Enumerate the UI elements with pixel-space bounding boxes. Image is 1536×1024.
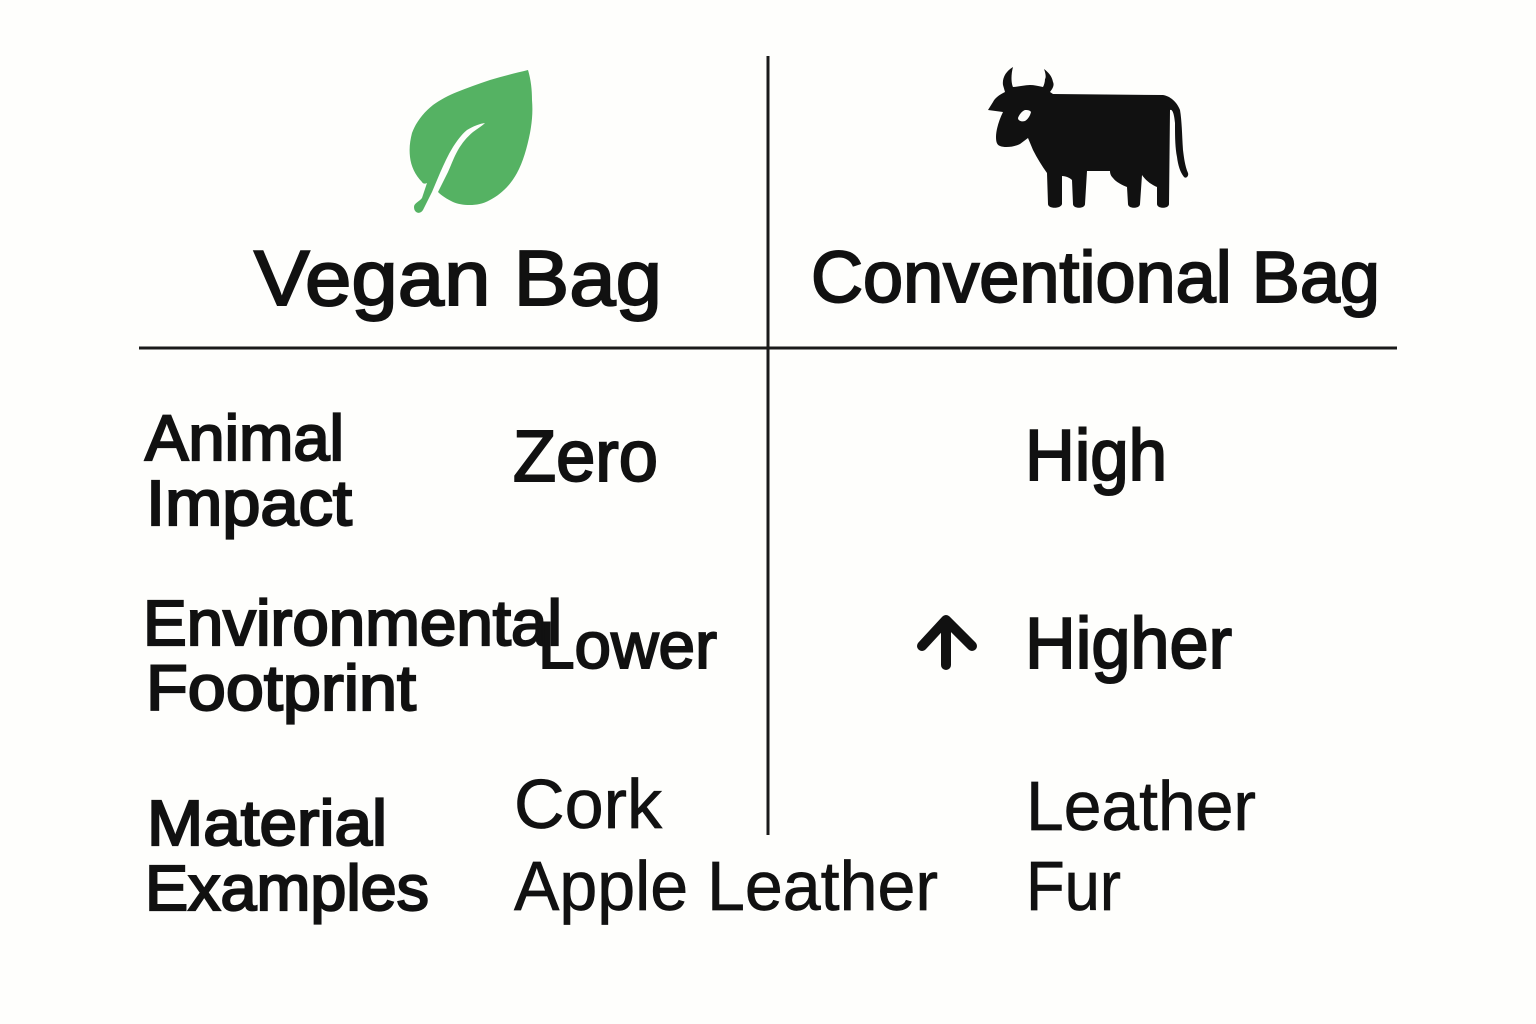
vegan value: Lower: Lower bbox=[538, 608, 717, 682]
row label: Material Examples bbox=[145, 787, 429, 924]
row label: Environmental Footprint: Environmental bbox=[143, 587, 562, 659]
vegan values: Cork, Apple Leather: Cork bbox=[514, 765, 663, 843]
heading: Vegan Bag: Vegan Bag bbox=[254, 234, 662, 322]
row label: Animal Impact bbox=[145, 402, 352, 539]
vegan values: Cork, Apple Leather: Apple Leather bbox=[514, 847, 938, 925]
row label: Environmental Footprint: Footprint bbox=[146, 652, 416, 724]
conventional values: Leather, Fur: Leather bbox=[1026, 767, 1256, 845]
conventional values: Leather, Fur: Fur bbox=[1026, 847, 1121, 925]
vegan values: Cork, Apple Leather bbox=[514, 765, 938, 925]
row label: Environmental Footprint bbox=[143, 587, 562, 724]
vegan value: Zero: Zero bbox=[513, 417, 658, 497]
heading: Conventional Bag: Conventional Bag bbox=[811, 238, 1380, 318]
conventional value: Higher: Higher bbox=[1025, 604, 1232, 684]
row label: Animal Impact: Animal bbox=[145, 402, 344, 474]
conventional value: High: High bbox=[1025, 416, 1167, 496]
icon: black cow bbox=[988, 67, 1188, 208]
icon: up arrow bbox=[922, 620, 972, 665]
conventional values: Leather, Fur bbox=[1026, 767, 1256, 925]
icon: green leaf bbox=[410, 70, 532, 213]
row label: Material Examples: Material bbox=[147, 787, 387, 859]
row label: Material Examples: Examples bbox=[145, 852, 429, 924]
row label: Animal Impact: Impact bbox=[146, 467, 352, 539]
